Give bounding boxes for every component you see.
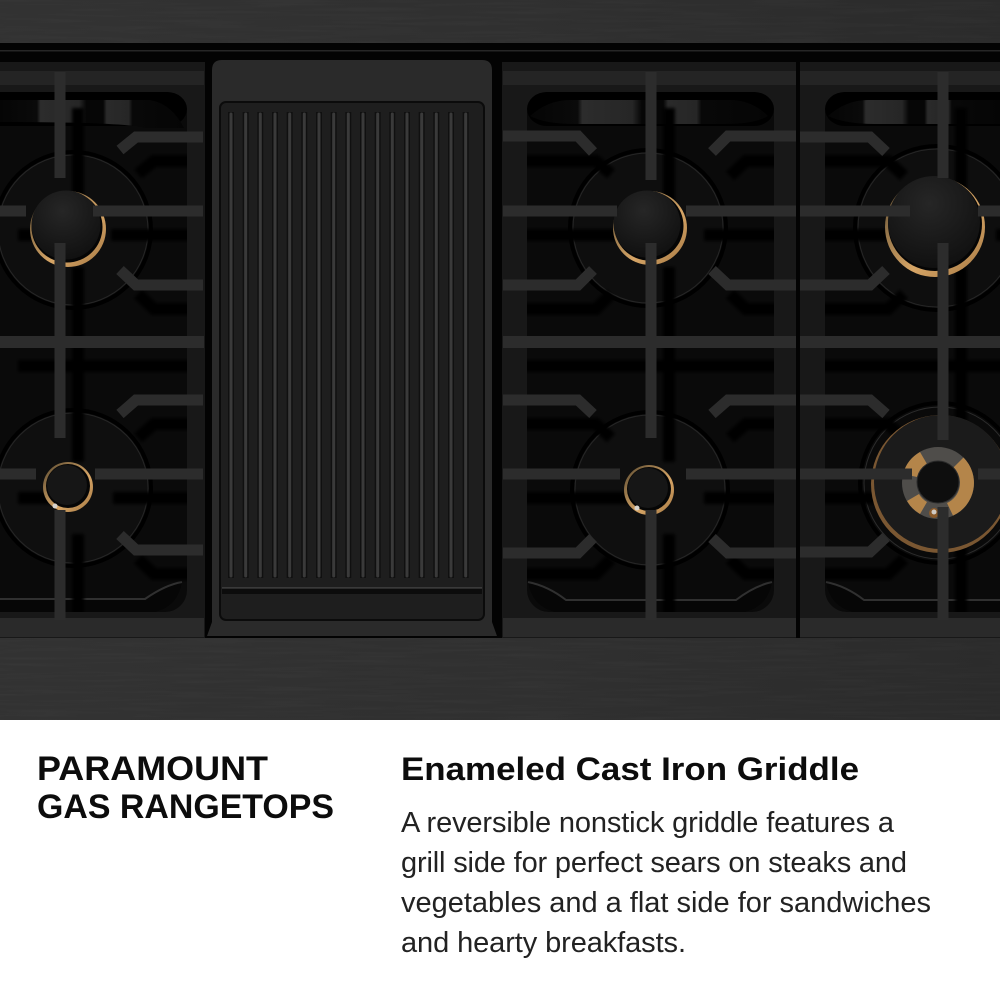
right front gloss trough [826,582,1000,612]
feature description: and hearty breakfasts. [401,927,686,959]
feature heading: Enameled Cast Iron Griddle [401,751,859,787]
middle top dish [570,150,726,306]
product title [37,750,334,826]
right bottom wok dish [860,403,1000,563]
middle bottom rail [503,618,796,637]
middle well [527,92,774,612]
feature description: A reversible nonstick griddle features a [401,807,895,839]
right burner section [800,62,1000,638]
cooktop photo background [0,0,1000,720]
middle top burner with brass ring [613,190,687,265]
middle grate shadows [527,106,774,601]
middle front gloss trough [528,582,772,612]
left front gloss trough [0,582,182,612]
left burner section [0,62,222,638]
left top burner with brass ring [30,190,106,267]
left bottom burner with brass ring [43,462,93,512]
left grate shadows [18,106,187,600]
griddle drip channel [222,587,482,618]
middle rear gloss trough [527,92,774,126]
middle grate bars [503,72,796,620]
left bottom burner dish [0,410,151,566]
right top dish [855,146,1000,310]
left well [0,92,187,612]
right grate shadows [825,126,1000,601]
middle burner section [502,62,815,638]
griddle recess [220,102,484,620]
griddle ribs [231,114,466,576]
right grate bars [800,72,1000,620]
left grate bars [0,72,204,620]
rear trim line [0,50,1000,52]
product title: GAS RANGETOPS [37,788,334,826]
right bottom wok burner [871,415,1000,553]
igniter [929,508,939,518]
left top burner dish [0,152,151,308]
right bottom rail [800,618,1000,637]
feature description [401,807,931,959]
front steel strip [0,638,1000,720]
left rear gloss trough [0,92,187,128]
right well [825,92,1000,612]
feature description: vegetables and a flat side for sandwiches [401,887,931,919]
right top burner with brass ring [885,176,985,277]
griddle rib shadows [231,112,466,578]
product title: PARAMOUNT [37,750,268,788]
feature description: grill side for perfect sears on steaks and [401,847,907,879]
right rear gloss trough [825,92,1000,126]
left bottom rail [0,618,204,637]
griddle [207,60,497,636]
rear steel strip [0,0,1000,43]
white caption panel [0,720,1000,1000]
middle bottom burner with brass ring [624,465,674,515]
middle bottom dish [572,412,728,568]
